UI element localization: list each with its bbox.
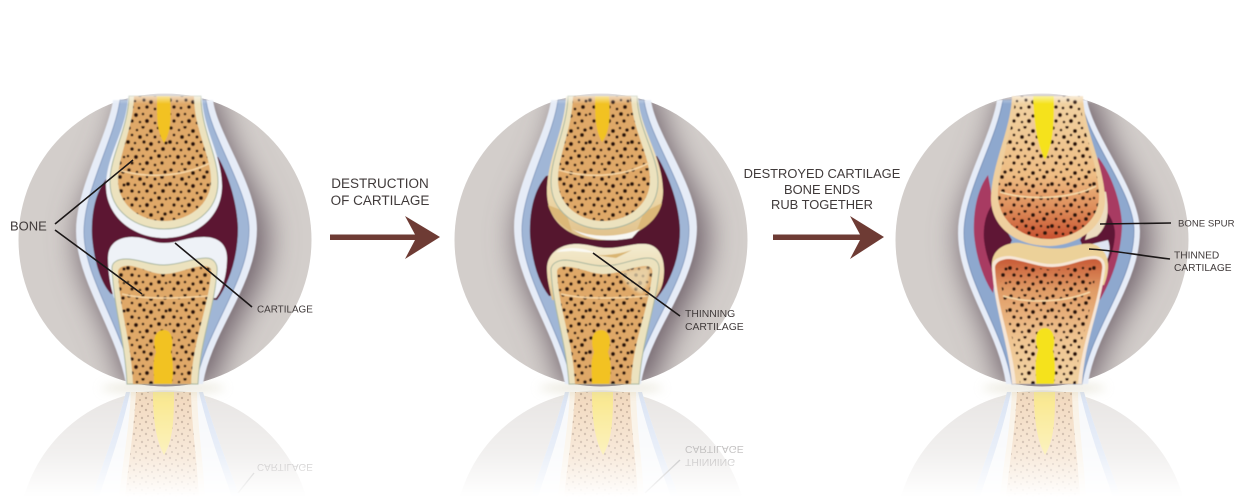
ground shadows: [101, 383, 1106, 393]
bone pointer lines: [55, 160, 142, 294]
reflection: joint 2: CARTILAGE: [685, 443, 744, 454]
caption: destruction of cartilage: [331, 176, 429, 208]
reflection: joint 2: THINNING: [685, 456, 735, 467]
caption: destroyed cartilage: [744, 166, 901, 212]
thinned cartilage label: CARTILAGE: [1174, 263, 1232, 274]
arrow 2: [773, 216, 884, 259]
bone spur label: BONE SPUR: [1178, 218, 1235, 230]
reflection: joint 1: CARTILAGE: [257, 461, 313, 472]
panel: destroyed cartilage joint: [896, 90, 1235, 390]
bone spur pointer line: [1100, 223, 1171, 224]
thinning cartilage label: CARTILAGE: [685, 322, 744, 333]
caption: destruction of cartilage: DESTRUCTION: [331, 176, 429, 191]
thinned cartilage pointer line: [1089, 249, 1170, 259]
thinned cartilage label: THINNED: [1174, 250, 1219, 262]
infographic canvas: [11, 94, 1234, 491]
cartilage label: CARTILAGE: [257, 304, 313, 316]
panel: healthy joint: [10, 90, 313, 390]
bone label: BONE: [10, 218, 47, 234]
cartilage pointer line: [175, 243, 252, 307]
thinning cartilage label: THINNING: [685, 309, 735, 320]
caption: destroyed cartilage: RUB TOGETHER: [771, 197, 873, 212]
reflection: joint 2: [460, 390, 744, 497]
caption: destroyed cartilage: DESTROYED CARTILAGE: [744, 166, 901, 181]
reflection: joint 3: [910, 390, 1174, 491]
panel: thinning cartilage joint: [454, 90, 748, 390]
thinning cartilage pointer line: [593, 253, 680, 316]
caption: destruction of cartilage: OF CARTILAGE: [331, 193, 429, 208]
caption: destroyed cartilage: BONE ENDS: [784, 182, 860, 197]
reflection: joint 1: [24, 390, 313, 497]
arrow 1: [330, 216, 440, 259]
